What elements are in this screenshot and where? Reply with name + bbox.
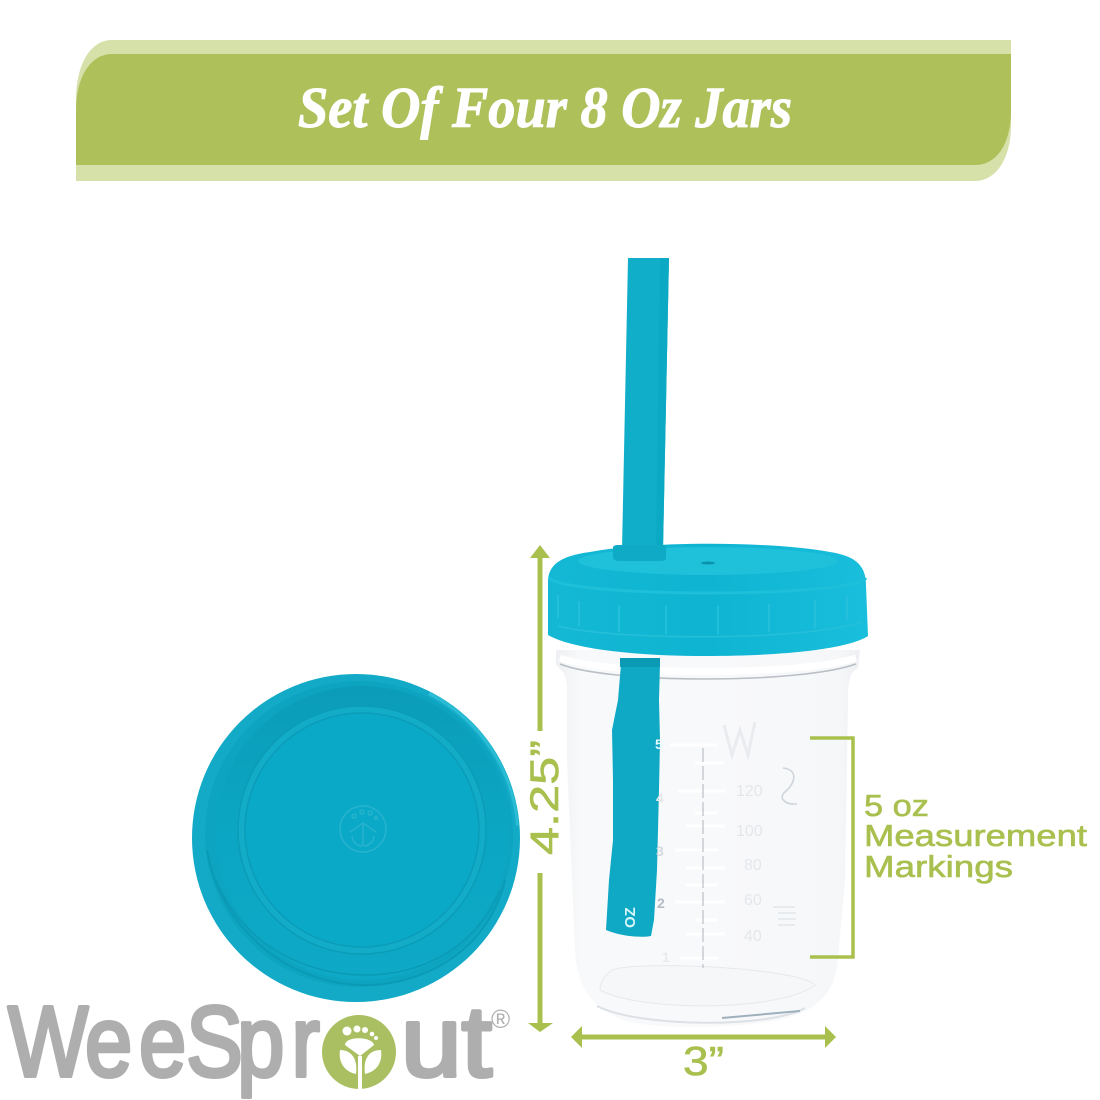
wordmark start: WeeSpr — [8, 985, 320, 1098]
glass jar body — [556, 650, 860, 1027]
banner back layer — [76, 40, 1011, 181]
embossed logo — [340, 806, 386, 852]
height arrow — [523, 545, 567, 1032]
measurement label: 5 oz — [864, 788, 929, 823]
millilitre numbers: 40 — [744, 928, 762, 945]
measurement label: Measurement — [864, 818, 1087, 853]
millilitre numbers: 120 — [736, 783, 763, 800]
jar lid — [548, 544, 868, 656]
wordmark end: ut — [401, 986, 492, 1098]
logo icon — [322, 1015, 396, 1089]
WeeSprout logo — [8, 985, 510, 1098]
banner front layer — [76, 54, 1011, 165]
measurement label: Markings — [864, 849, 1013, 884]
width label: 3” — [683, 1038, 724, 1084]
ounce numbers: 4 — [656, 790, 664, 806]
millilitre numbers: 100 — [736, 823, 763, 840]
jar with straw — [548, 258, 868, 1027]
straw collar — [613, 545, 666, 561]
straw inside jar — [606, 664, 660, 937]
lid outer rim — [192, 674, 520, 1002]
title: Set Of Four 8 Oz Jars — [298, 75, 792, 140]
measurement label — [864, 788, 1087, 884]
straw above lid — [622, 258, 669, 550]
height label: 4.25” — [523, 740, 567, 855]
ounce numbers: 3 — [656, 843, 664, 859]
registered mark: ® — [491, 1004, 510, 1034]
ounce numbers: 5 — [655, 736, 663, 752]
measurement bracket — [810, 738, 853, 957]
banner — [76, 40, 1011, 181]
width arrow — [571, 1026, 836, 1084]
ounce numbers — [622, 736, 670, 965]
lid inner ring — [238, 706, 486, 954]
millilitre numbers — [736, 783, 763, 945]
ounce numbers: OZ — [622, 907, 639, 928]
ounce numbers: 1 — [662, 949, 670, 965]
flipped lid — [192, 674, 520, 1002]
millilitre numbers: 60 — [744, 892, 762, 909]
ounce numbers: 2 — [657, 895, 665, 911]
millilitre numbers: 80 — [744, 857, 762, 874]
measurement markings — [670, 745, 725, 958]
